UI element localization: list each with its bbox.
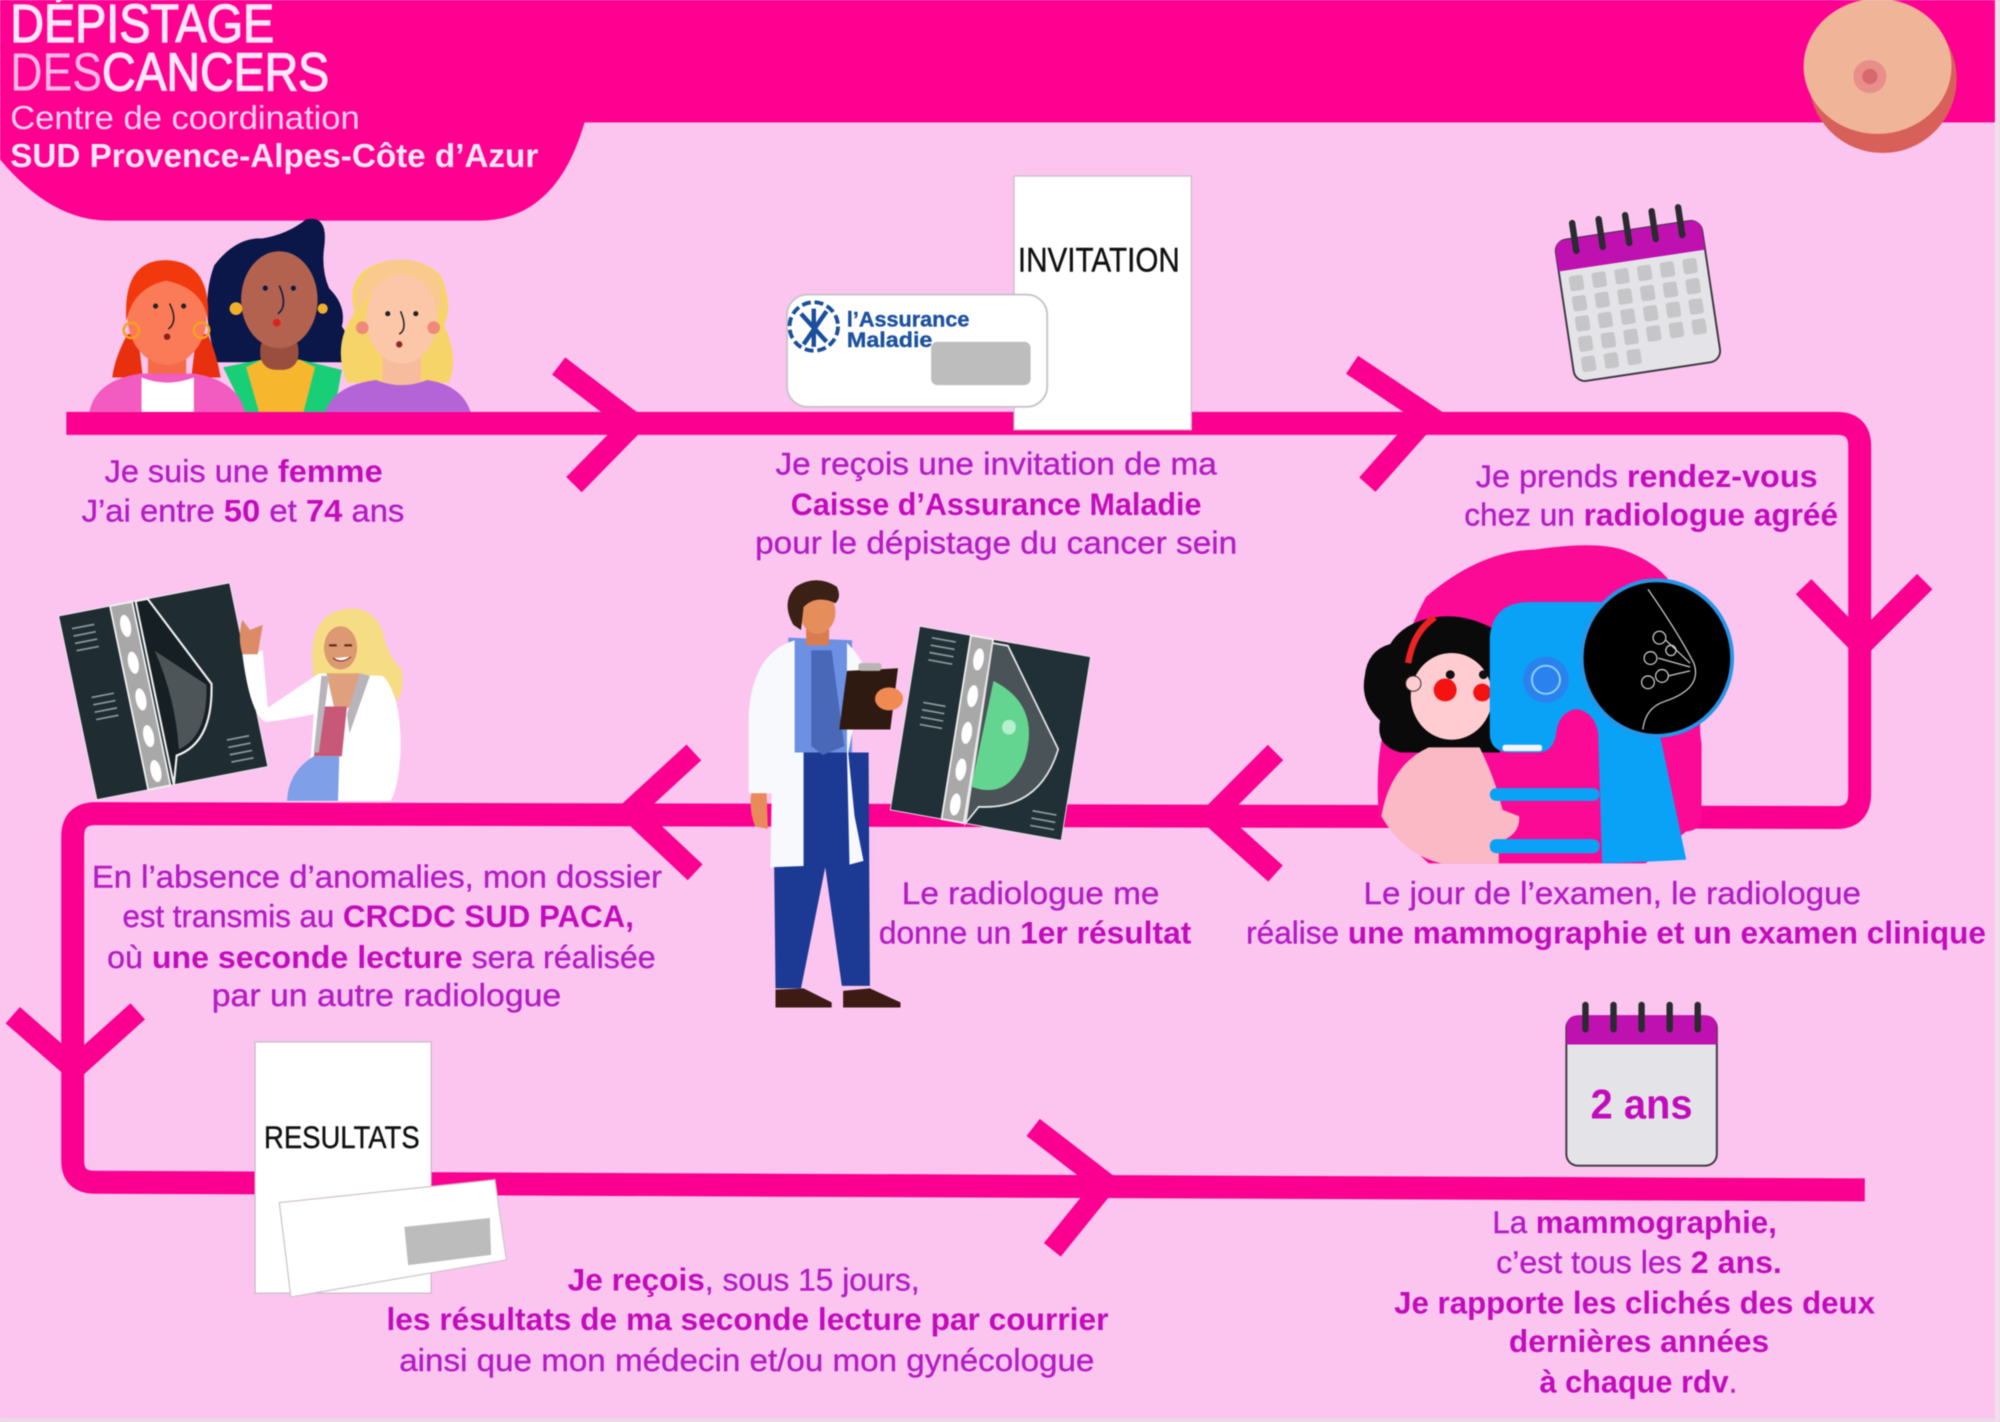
arrow 1 xyxy=(559,366,634,485)
arrow 6 xyxy=(13,1011,138,1069)
title: organisation name: DES xyxy=(10,44,102,103)
text: step 1 xyxy=(82,453,404,529)
illustration: Assurance Maladie envelope xyxy=(787,295,1047,407)
text: step 6: En l’absence d’anomalies, mon dossier xyxy=(92,859,662,895)
text: step 7: les résultats de ma seconde lecture par courrier xyxy=(386,1301,1108,1337)
text: step 6: par un autre radiologue xyxy=(212,977,561,1013)
text: step 1: Je suis une femme xyxy=(105,453,383,489)
illustration: results envelope xyxy=(279,1180,506,1297)
illustration: results letter xyxy=(255,1042,431,1293)
text: step 3: Je prends rendez-vous xyxy=(1476,458,1818,494)
icon: 2-year calendar xyxy=(1566,1005,1717,1166)
arrow 2 xyxy=(1352,365,1429,485)
text: step 5 xyxy=(879,875,1192,951)
title: organisation name: CANCERS xyxy=(102,44,329,103)
header banner xyxy=(0,0,1995,221)
text: step 7 xyxy=(386,1262,1108,1378)
text: step 3: chez un radiologue agréé xyxy=(1464,496,1838,532)
text: step 3 xyxy=(1464,458,1838,532)
text: step 5: donne un 1er résultat xyxy=(879,915,1192,951)
illustration: three women xyxy=(89,219,471,412)
text: step 2: pour le dépistage du cancer sein xyxy=(755,524,1237,560)
text: step 7: ainsi que mon médecin et/ou mon gynécologue xyxy=(399,1342,1094,1378)
text: step 5: Le radiologue me xyxy=(902,875,1159,911)
text: step 8: La mammographie, xyxy=(1492,1204,1777,1240)
illustration: x-ray with green nodule xyxy=(890,626,1091,840)
text: step 2: Je reçois une invitation de ma xyxy=(776,445,1217,481)
illustration: female doctor xyxy=(240,609,403,801)
text: step 8: à chaque rdv. xyxy=(1540,1364,1737,1400)
illustration: results letter: RESULTATS xyxy=(264,1119,420,1155)
icon: breast logo xyxy=(1804,0,1957,153)
timeline path xyxy=(66,423,1865,1190)
text: step 1: J’ai entre 50 et 74 ans xyxy=(82,493,404,529)
text: step 8: c’est tous les 2 ans. xyxy=(1496,1244,1782,1280)
illustration: x-ray sheet held by female doctor xyxy=(59,583,268,800)
illustration: Assurance Maladie envelope: l’Assurance xyxy=(847,306,969,331)
arrow 5 xyxy=(630,752,695,872)
text: step 6: où une seconde lecture sera réalisée xyxy=(107,939,656,975)
illustration: invitation letter xyxy=(1014,176,1191,430)
title: organisation name: SUD Provence-Alpes-Côte d’Azur xyxy=(10,138,538,175)
text: step 4 xyxy=(1246,875,1986,951)
illustration: invitation letter: INVITATION xyxy=(1018,242,1180,280)
icon: 2-year calendar: 2 ans xyxy=(1591,1080,1693,1127)
text: step 2: Caisse d’Assurance Maladie xyxy=(791,486,1202,522)
text: step 8 xyxy=(1394,1204,1875,1400)
text: step 2 xyxy=(755,445,1237,560)
arrow 7 xyxy=(1033,1127,1106,1250)
text: step 8: Je rapporte les clichés des deux xyxy=(1394,1285,1875,1321)
title: organisation name: Centre de coordination xyxy=(10,100,360,137)
icon: tilted calendar xyxy=(1552,204,1722,383)
arrow 4 xyxy=(1212,752,1276,874)
illustration: Assurance Maladie envelope: Maladie xyxy=(847,327,932,352)
text: step 7: Je reçois, sous 15 jours, xyxy=(568,1262,920,1298)
illustration: mammography exam xyxy=(1364,545,1732,863)
illustration: male radiologist with x-ray xyxy=(749,580,903,1008)
text: step 8: dernières années xyxy=(1509,1323,1769,1359)
text: step 4: Le jour de l’examen, le radiologue xyxy=(1364,875,1861,911)
title: organisation name xyxy=(10,0,538,175)
text: step 4: réalise une mammographie et un examen clinique xyxy=(1246,915,1986,951)
text: step 6 xyxy=(92,859,662,1013)
text: step 6: est transmis au CRCDC SUD PACA, xyxy=(122,898,634,934)
arrow 3 xyxy=(1804,582,1925,645)
